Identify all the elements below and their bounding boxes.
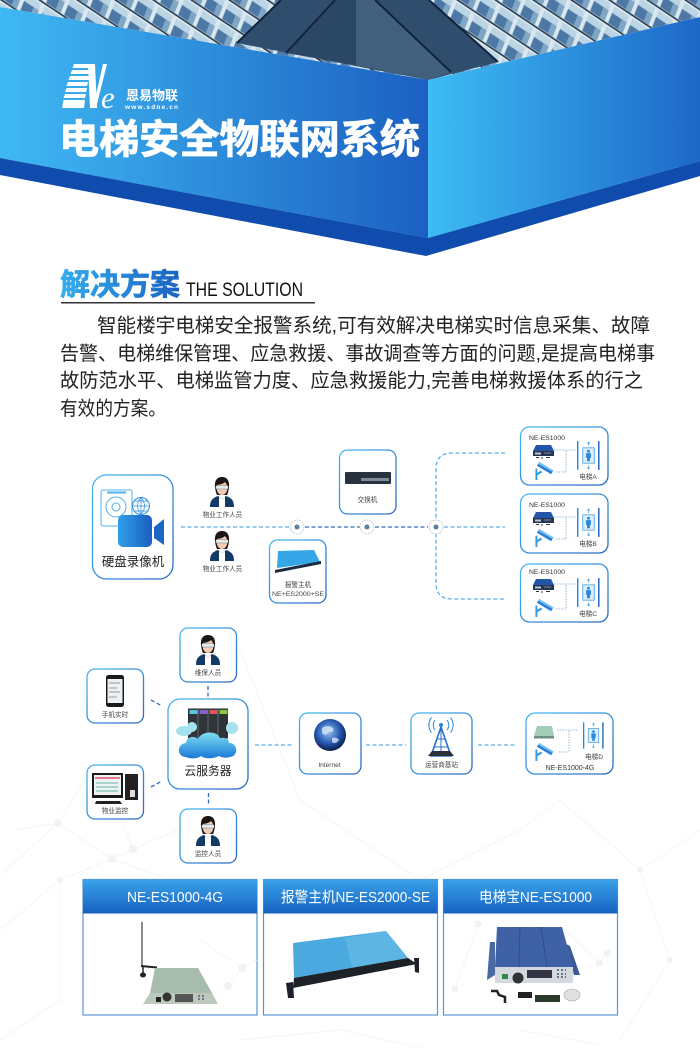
product: alarm host NE-ES2000-SE [264,880,438,1015]
card: elevator B: NE-ES1000 [529,502,565,509]
card: maintenance staff: 维保人员 [195,668,222,677]
logo [62,64,178,115]
intro paragraph: 智能楼宇电梯安全报警系统,可有效解决电梯实时信息采集、故障 [97,315,650,337]
card: elevator D: 电梯D [585,752,603,761]
intro paragraph [60,315,655,420]
connection lines [181,453,505,599]
card: internet [300,713,361,774]
intro paragraph: 有效的方案。 [60,398,166,420]
card: monitoring staff: 监控人员 [195,849,222,858]
person: staff 2: 物业工作人员 [203,564,243,573]
logo: e [101,80,115,115]
header banner [0,0,700,256]
card: elevator C: NE-ES1000 [529,569,565,576]
background: faint network pattern [0,650,700,1048]
left blue panel [0,7,428,238]
card: property monitoring: 物业监控 [102,806,129,815]
card: property monitoring [87,765,144,819]
card: switch [340,450,396,514]
card: elevator A: 电梯A [579,472,597,481]
card: DVR [92,475,173,579]
heading: the solution: 解决方案 [60,269,180,302]
device photo: rack host [286,931,419,998]
building photo [0,0,700,80]
card: elevator A [520,427,608,485]
diagram: local network [92,427,608,622]
connection lines [151,686,517,805]
product: elevator box NE-ES1000 [444,880,618,1015]
card: elevator A: NE-ES1000 [529,435,565,442]
card: monitoring staff [180,809,236,863]
card: elevator B [520,494,608,553]
person: staff 1 [203,477,243,519]
right blue panel [428,17,700,238]
intro paragraph: 故防范水平、电梯监管力度、应急救援能力,完善电梯救援体系的行之 [60,370,643,392]
card: switch: 交换机 [358,495,378,504]
card: cloud server [168,699,248,789]
card: maintenance staff [180,628,236,682]
card: cloud server: 云服务器 [184,764,232,778]
card: DVR: 硬盘录像机 [102,554,165,569]
card: mobile phone [87,669,144,723]
logo: www.sdne.cn [124,104,178,111]
card: elevator D: NE-ES1000-4G [546,765,594,772]
person: staff 1: 物业工作人员 [203,510,243,519]
product: NE-ES1000-4G: NE-ES1000-4G [127,889,223,906]
intro paragraph: 告警、电梯维保管理、应急救援、事故调查等方面的问题,是提高电梯事 [60,343,655,365]
card: alarm host: 报警主机 [285,580,312,589]
heading: the solution: THE SOLUTION [186,280,303,301]
diagram: cloud network [87,628,613,863]
product: elevator box NE-ES1000: 电梯宝NE-ES1000 [479,889,592,906]
card: mobile phone: 手机实时 [102,710,129,719]
heading: the solution [60,269,315,304]
card: alarm host: NE+ES2000+SE [272,591,325,598]
product: alarm host NE-ES2000-SE: 报警主机NE-ES2000-SE [281,889,430,906]
device photo: elevator box [452,920,610,1003]
logo: 恩易物联 [126,88,178,103]
product: NE-ES1000-4G [83,880,257,1015]
card: elevator D [526,713,613,774]
dark lower band [0,158,700,256]
card: internet: Internet [318,762,341,769]
card: base station: 运营商基站 [425,760,458,769]
card: base station [411,713,472,774]
title: 电梯安全物联网系统 [59,118,420,162]
card: elevator C: 电梯C [579,609,597,618]
card: alarm host [270,540,326,603]
person: staff 2 [203,531,243,573]
card: elevator B: 电梯B [579,539,597,548]
card: elevator C [520,564,608,622]
device photo: 4G unit [140,922,257,1004]
